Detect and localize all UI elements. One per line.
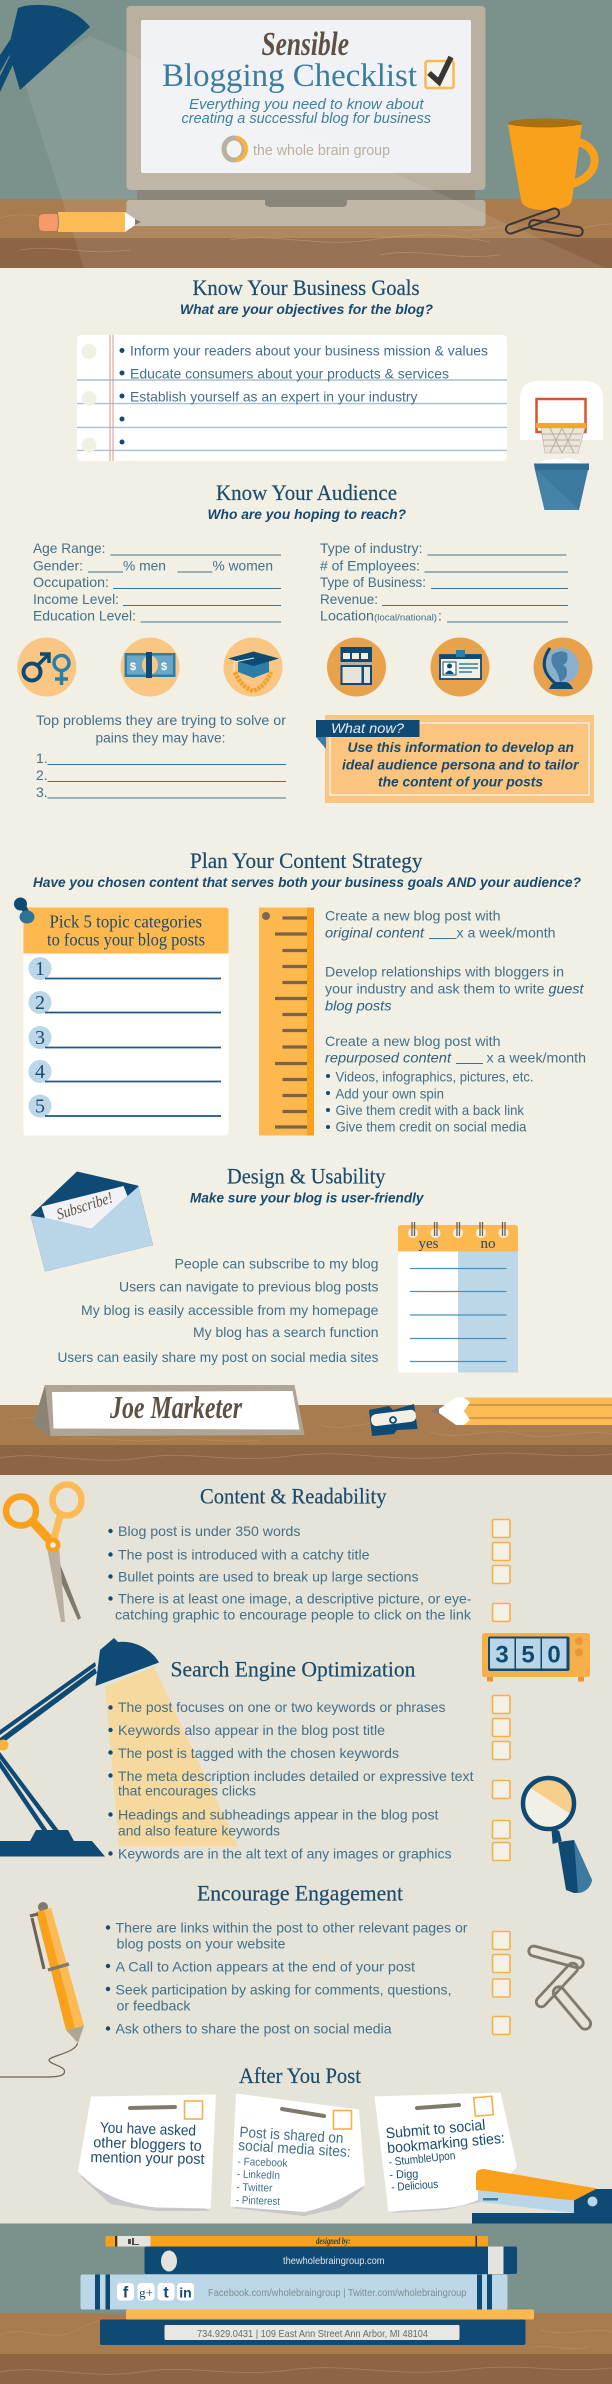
subheading: What are your objectives for the blog? [180, 301, 433, 317]
icon: desk lamp shade [0, 5, 90, 92]
icon: money [120, 638, 180, 696]
sticky note: social bookmarking: - Delicious [391, 2179, 439, 2194]
icon: scissors [6, 1484, 82, 1622]
icon: magnifying glass [523, 1776, 592, 1893]
form: business profile: Type of Business: [320, 574, 426, 590]
icon: money: $ [130, 661, 136, 673]
sticky note: social media sites [230, 2094, 365, 2216]
sticky note: social media sites: - Facebook [237, 2156, 288, 2170]
panel: encourage engagement [0, 1880, 593, 2077]
icon: globe [534, 638, 592, 696]
checklist text: There is at least one image, a descriptive picture, or eye- [118, 1590, 472, 1606]
text: repurposed content: Add your own spin [336, 1086, 444, 1102]
icon: subscribe envelope [30, 1172, 153, 1272]
card: pick 5 topic categories: Pick 5 topic categories [50, 912, 202, 932]
book: website [144, 2246, 517, 2274]
panel: lower checklist background [0, 1475, 612, 2224]
text: repurposed content: Give them credit on social media [336, 1118, 527, 1134]
checkboxes [492, 1696, 510, 1860]
heading: After You Post [239, 2063, 361, 2088]
sticky note: ask other bloggers: You have asked [100, 2119, 196, 2140]
form: business profile: : [438, 608, 442, 624]
sticky note: ask other bloggers: other bloggers to [93, 2134, 202, 2155]
title: Sensible: Sensible [262, 26, 349, 63]
form: business profile: Revenue: [320, 591, 378, 607]
panel: middle desk scene [0, 1385, 612, 1475]
checklist text: that encourages clicks [118, 1782, 256, 1798]
text: repurposed content [325, 1033, 586, 1134]
checklist text: Ask others to share the post on social media [116, 2020, 392, 2036]
icon: large pencil [431, 1398, 612, 1425]
checklist text: The post focuses on one or two keywords or phrases [118, 1699, 446, 1715]
sticky note: social bookmarking: Submit to social [385, 2117, 486, 2142]
name plate: Joe Marketer: Joe Marketer [109, 1389, 242, 1425]
panel: know your business goals [77, 275, 603, 510]
book: social media: g+ [139, 2285, 153, 2300]
text: original content: x a week/month [456, 924, 556, 940]
callout: what now: the content of your posts [378, 774, 543, 790]
laptop [126, 6, 486, 226]
book: designed by [106, 2236, 488, 2246]
card: pick 5 topic categories: to focus your blog posts [47, 930, 205, 950]
text: guest blog posts: blog posts [325, 998, 392, 1014]
icon: pen with scribble [0, 1902, 84, 2077]
checklist text [106, 1920, 468, 2036]
sticky note: social media sites: Post is shared on [239, 2124, 344, 2147]
notebook paper list: Educate consumers about your products & services [130, 366, 449, 382]
form: demographics: % women [212, 558, 273, 574]
checklist text: Headings and subheadings appear in the blog post [118, 1806, 439, 1822]
panel: book stack with contact details [80, 2236, 534, 2345]
heading: Plan Your Content Strategy [190, 848, 422, 873]
book: social media: t [163, 2284, 169, 2302]
heading: Design & Usability [227, 1164, 386, 1188]
text: original content: Create a new blog post with [325, 908, 500, 924]
panel: search engine optimization [0, 1633, 592, 1893]
book: social media: in [179, 2284, 192, 2300]
checklist text: Keywords also appear in the blog post title [118, 1722, 385, 1738]
icon: 350 flip clock [482, 1633, 590, 1682]
sticky note: social media sites: - Pinterest [236, 2195, 280, 2208]
form: demographics: Gender: [33, 558, 83, 574]
checklist labels: Users can navigate to previous blog posts [119, 1278, 378, 1294]
notebook paper list: Establish yourself as an expert in your industry [130, 388, 418, 404]
card: pick 5 topic categories: 3 [35, 1027, 45, 1049]
book: website: thewholebraingroup.com [283, 2255, 385, 2267]
book: plain orange [126, 2310, 534, 2320]
light beam [105, 1666, 238, 1846]
icon: push pin [14, 898, 34, 924]
checklist labels [58, 1256, 379, 1365]
text: guest blog posts [325, 964, 585, 1014]
icon: office building [327, 638, 386, 696]
text: repurposed content: Videos, infographics, pictures, etc. [336, 1068, 534, 1084]
icon: graduation cap [224, 638, 282, 696]
icon: pencil [39, 212, 141, 232]
form: demographics: Education Level: [33, 608, 136, 624]
heading: Content & Readability [200, 1484, 386, 1508]
panel: know your audience [17, 480, 594, 803]
text: guest blog posts: Develop relationships with bloggers in [325, 964, 564, 980]
checklist text [108, 1699, 474, 1862]
heading: Know Your Business Goals [192, 275, 420, 300]
yes/no notepad [398, 1222, 518, 1372]
checklist text: or feedback [116, 1998, 191, 2014]
sticky note: ask other bloggers: mention your post [90, 2149, 205, 2168]
checklist text: blog posts on your website [116, 1936, 286, 1952]
heading: Encourage Engagement [197, 1880, 403, 1906]
icon: id badge [430, 638, 490, 696]
sticky note: social bookmarking: - Digg [389, 2168, 419, 2181]
checklist labels: People can subscribe to my blog [174, 1256, 378, 1272]
icon: 350 flip clock: 3 [495, 1642, 509, 1668]
subheading: Have you chosen content that serves both your business goals AND your audience? [33, 874, 581, 890]
notebook paper list: Inform your readers about your business mission & values [130, 342, 488, 358]
sticky note: ask other bloggers [78, 2094, 216, 2211]
form: demographics: % men [123, 558, 166, 574]
text: guest blog posts: guest [548, 980, 585, 996]
checkboxes [492, 1520, 510, 1622]
text: top problems list: pains they may have: [96, 730, 226, 746]
checklist labels: My blog has a search function [193, 1324, 378, 1340]
card: pick 5 topic categories: 5 [35, 1096, 45, 1118]
checklist text: Bullet points are used to break up large sections [118, 1568, 418, 1584]
card: pick 5 topic categories: 4 [35, 1061, 45, 1083]
checklist text: and also feature keywords [118, 1822, 280, 1838]
form: demographics: Occupation: [33, 574, 109, 590]
icon: paper clips [528, 1945, 593, 2031]
logo: the whole brain group [224, 138, 390, 160]
checklist text: The post is introduced with a catchy title [118, 1546, 370, 1562]
form: business profile [320, 540, 568, 624]
checklist text: There are links within the post to other relevant pages or [116, 1920, 468, 1936]
callout: what now: ideal audience persona and to tailor [342, 756, 580, 772]
panel: design and usability [30, 1164, 518, 1372]
checklist labels: Users can easily share my post on social media sites [58, 1349, 378, 1365]
form: demographics: Income Level: [33, 591, 119, 607]
card: pick 5 topic categories: 2 [35, 992, 45, 1014]
notebook paper list [77, 335, 507, 461]
icon: checked box [426, 57, 454, 88]
form: demographics [33, 540, 281, 624]
card: pick 5 topic categories: 1 [35, 958, 45, 980]
form: demographics: Age Range: [33, 540, 106, 556]
book: social media [80, 2274, 508, 2310]
sticky note: social media sites: - LinkedIn [237, 2169, 280, 2182]
book: social media: f [123, 2284, 129, 2302]
panel: after you post [78, 2063, 517, 2216]
text: repurposed content: Give them credit with a back link [336, 1102, 525, 1118]
sticky note: social bookmarking [374, 2092, 517, 2213]
checklist text: A Call to Action appears at the end of your post [116, 1958, 415, 1974]
book: phone and address: 734.929.0431 | 109 East Ann Street Ann Arbor, MI 48104 [197, 2328, 428, 2340]
subheading: Who are you hoping to reach? [208, 506, 406, 522]
checklist text: Seek participation by asking for comments, questions, [116, 1982, 451, 1998]
icon: 350 flip clock: 0 [547, 1642, 561, 1668]
subtitle: Everything you need to know about [189, 96, 424, 113]
checklist text: Blog post is under 350 words [118, 1523, 300, 1539]
checklist labels: My blog is easily accessible from my homepage [81, 1302, 379, 1318]
panel: footer wall and desk [0, 2224, 612, 2384]
book: phone and address [100, 2320, 526, 2345]
form: business profile: Type of industry: [320, 540, 422, 556]
icon: coffee mug [508, 118, 595, 210]
checkboxes [492, 1932, 510, 2034]
icon: subscribe envelope: Subscribe! [55, 1189, 115, 1224]
checklist text [108, 1523, 472, 1622]
icon: desk lamp [0, 1638, 159, 1856]
text: repurposed content: Create a new blog post with [325, 1033, 500, 1049]
callout: what now: What now? [331, 720, 404, 736]
subheading: Make sure your blog is user-friendly [190, 1190, 425, 1206]
form: business profile: Location [320, 608, 374, 624]
panel: header desk scene [0, 0, 612, 271]
sticky note: social media sites: social media sites: [238, 2137, 351, 2161]
panel: content and readability [6, 1484, 510, 1622]
text: top problems list: 2. [36, 767, 48, 783]
heading: Know Your Audience [216, 480, 397, 505]
icon: 350 flip clock: 5 [521, 1642, 535, 1668]
text: original content [325, 908, 556, 940]
checklist text: The post is tagged with the chosen keywords [118, 1745, 399, 1761]
text: guest blog posts: your industry and ask them to write [325, 980, 545, 996]
icon: paper clips [505, 207, 583, 237]
sticky note: social bookmarking: bookmarking sties: [387, 2130, 506, 2157]
text: top problems list: 3. [36, 784, 48, 800]
checklist text: Keywords are in the alt text of any images or graphics [118, 1846, 452, 1862]
yes/no notepad: yes [418, 1236, 439, 1252]
book: social media: Facebook.com/wholebraingroup | Twitter.com/wholebraingroup [208, 2287, 467, 2299]
form: business profile: (local/national) [374, 612, 437, 622]
callout: what now: Use this information to develop an [348, 739, 574, 755]
yes/no notepad: no [480, 1236, 496, 1252]
icon: pencil sharpener [369, 1404, 418, 1436]
name plate: Joe Marketer [33, 1385, 304, 1436]
sticky note: social bookmarking: - StumbleUpon [388, 2150, 456, 2169]
text: repurposed content: repurposed content [325, 1050, 452, 1066]
text: repurposed content: x a week/month [486, 1050, 586, 1066]
text: top problems list [36, 712, 286, 800]
card: pick 5 topic categories [24, 908, 228, 1136]
book: designed by: designed by: [316, 2236, 350, 2246]
icon: money: $ [161, 661, 167, 673]
panel: plan your content strategy [14, 848, 586, 1136]
callout: what now [316, 715, 594, 803]
subtitle [182, 96, 431, 127]
checklist text: The meta description includes detailed or expressive text [118, 1768, 474, 1784]
logo: the whole brain group: the whole brain group [253, 142, 390, 159]
icon: basketball hoop and bin [520, 381, 603, 510]
text: top problems list: 1. [36, 750, 48, 766]
text: top problems list: Top problems they are trying to solve or [36, 712, 286, 728]
text: original content: original content [325, 924, 425, 940]
heading: Search Engine Optimization [170, 1656, 416, 1682]
icon: stapler [472, 2169, 612, 2224]
sticky note: social media sites: - Twitter [236, 2182, 273, 2195]
subtitle: creating a successful blog for business [182, 110, 431, 127]
form: business profile: # of Employees: [320, 558, 420, 574]
icon: gender symbols [17, 638, 76, 696]
icon: ruler [259, 908, 314, 1136]
checklist text: catching graphic to encourage people to click on the link [115, 1606, 472, 1622]
title: Blogging Checklist: Blogging Checklist [162, 58, 417, 94]
